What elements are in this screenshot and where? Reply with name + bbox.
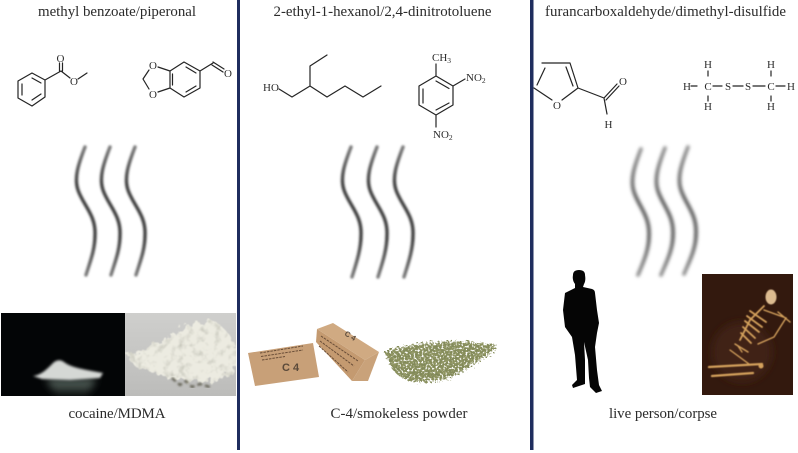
photo: skeleton remains xyxy=(702,274,793,395)
photo: C-4 blocks: C 4 xyxy=(343,329,358,343)
panel: cocaine/MDMA xyxy=(1,4,238,422)
molecule: dimethyl-disulfide: H xyxy=(767,101,775,113)
molecule: 2,4-dinitrotoluene: 3 xyxy=(447,56,451,65)
molecule: methyl benzoate xyxy=(18,53,87,106)
molecule: 2,4-dinitrotoluene: CH xyxy=(432,52,447,64)
molecule: methyl benzoate: O xyxy=(70,76,78,88)
molecule: dimethyl-disulfide: C xyxy=(704,81,712,93)
molecule: dimethyl-disulfide: H xyxy=(683,81,691,93)
molecule: 2-ethyl-1-hexanol: HO xyxy=(263,82,279,94)
smoke lines xyxy=(76,147,145,275)
photo: C-4 blocks xyxy=(248,323,379,386)
molecule: piperonal xyxy=(143,60,232,101)
molecule: 2-ethyl-1-hexanol xyxy=(263,55,381,97)
molecule: dimethyl-disulfide: S xyxy=(725,81,731,93)
caption: C-4/smokeless powder: C-4/smokeless powder xyxy=(330,406,468,422)
caption: live person/corpse: live person/corpse xyxy=(609,406,717,422)
smoke lines xyxy=(342,147,413,277)
photo: C-4 blocks: C 4 xyxy=(282,362,300,374)
molecule: piperonal: O xyxy=(149,89,157,101)
molecule: 2,4-dinitrotoluene: 2 xyxy=(449,133,453,142)
molecule: furancarboxaldehyde xyxy=(534,63,627,131)
molecule: furancarboxaldehyde: O xyxy=(619,76,627,88)
molecule: 2,4-dinitrotoluene: 2 xyxy=(482,76,486,85)
molecule: dimethyl-disulfide: H xyxy=(704,59,712,71)
molecule: 2,4-dinitrotoluene: NO xyxy=(433,129,449,141)
photo: MDMA xyxy=(125,313,238,396)
molecule: piperonal: O xyxy=(224,68,232,80)
molecule: 2,4-dinitrotoluene: NO xyxy=(466,72,482,84)
molecule: 2,4-dinitrotoluene xyxy=(419,52,486,142)
panel: C-4/smokeless powder xyxy=(248,4,497,422)
photo: cocaine xyxy=(1,313,125,396)
molecule: furancarboxaldehyde: H xyxy=(605,119,613,131)
divider: left xyxy=(237,0,240,450)
molecule: dimethyl-disulfide: H xyxy=(767,59,775,71)
caption: cocaine/MDMA: cocaine/MDMA xyxy=(68,406,166,422)
divider: right xyxy=(530,0,534,450)
molecule: piperonal: O xyxy=(149,60,157,72)
molecule: methyl benzoate: O xyxy=(57,53,65,65)
heading: methyl benzoate/piperonal: methyl benzoate/piperonal xyxy=(38,4,196,20)
molecule: dimethyl-disulfide xyxy=(683,59,795,113)
icon: person silhouette xyxy=(563,270,602,393)
smoke lines xyxy=(632,147,696,275)
molecule: furancarboxaldehyde: O xyxy=(553,100,561,112)
heading: furancarboxaldehyde/dimethyl-disulfide: furancarboxaldehyde/dimethyl-disulfide xyxy=(545,4,786,20)
photo: smokeless powder xyxy=(385,341,497,382)
heading: 2-ethyl-1-hexanol/2,4-dinitrotoluene: 2-ethyl-1-hexanol/2,4-dinitrotoluene xyxy=(274,4,492,20)
molecule: dimethyl-disulfide: H xyxy=(787,81,795,93)
molecule: dimethyl-disulfide: S xyxy=(745,81,751,93)
panel: live person/corpse xyxy=(534,4,795,422)
molecule: dimethyl-disulfide: C xyxy=(767,81,775,93)
molecule: dimethyl-disulfide: H xyxy=(704,101,712,113)
